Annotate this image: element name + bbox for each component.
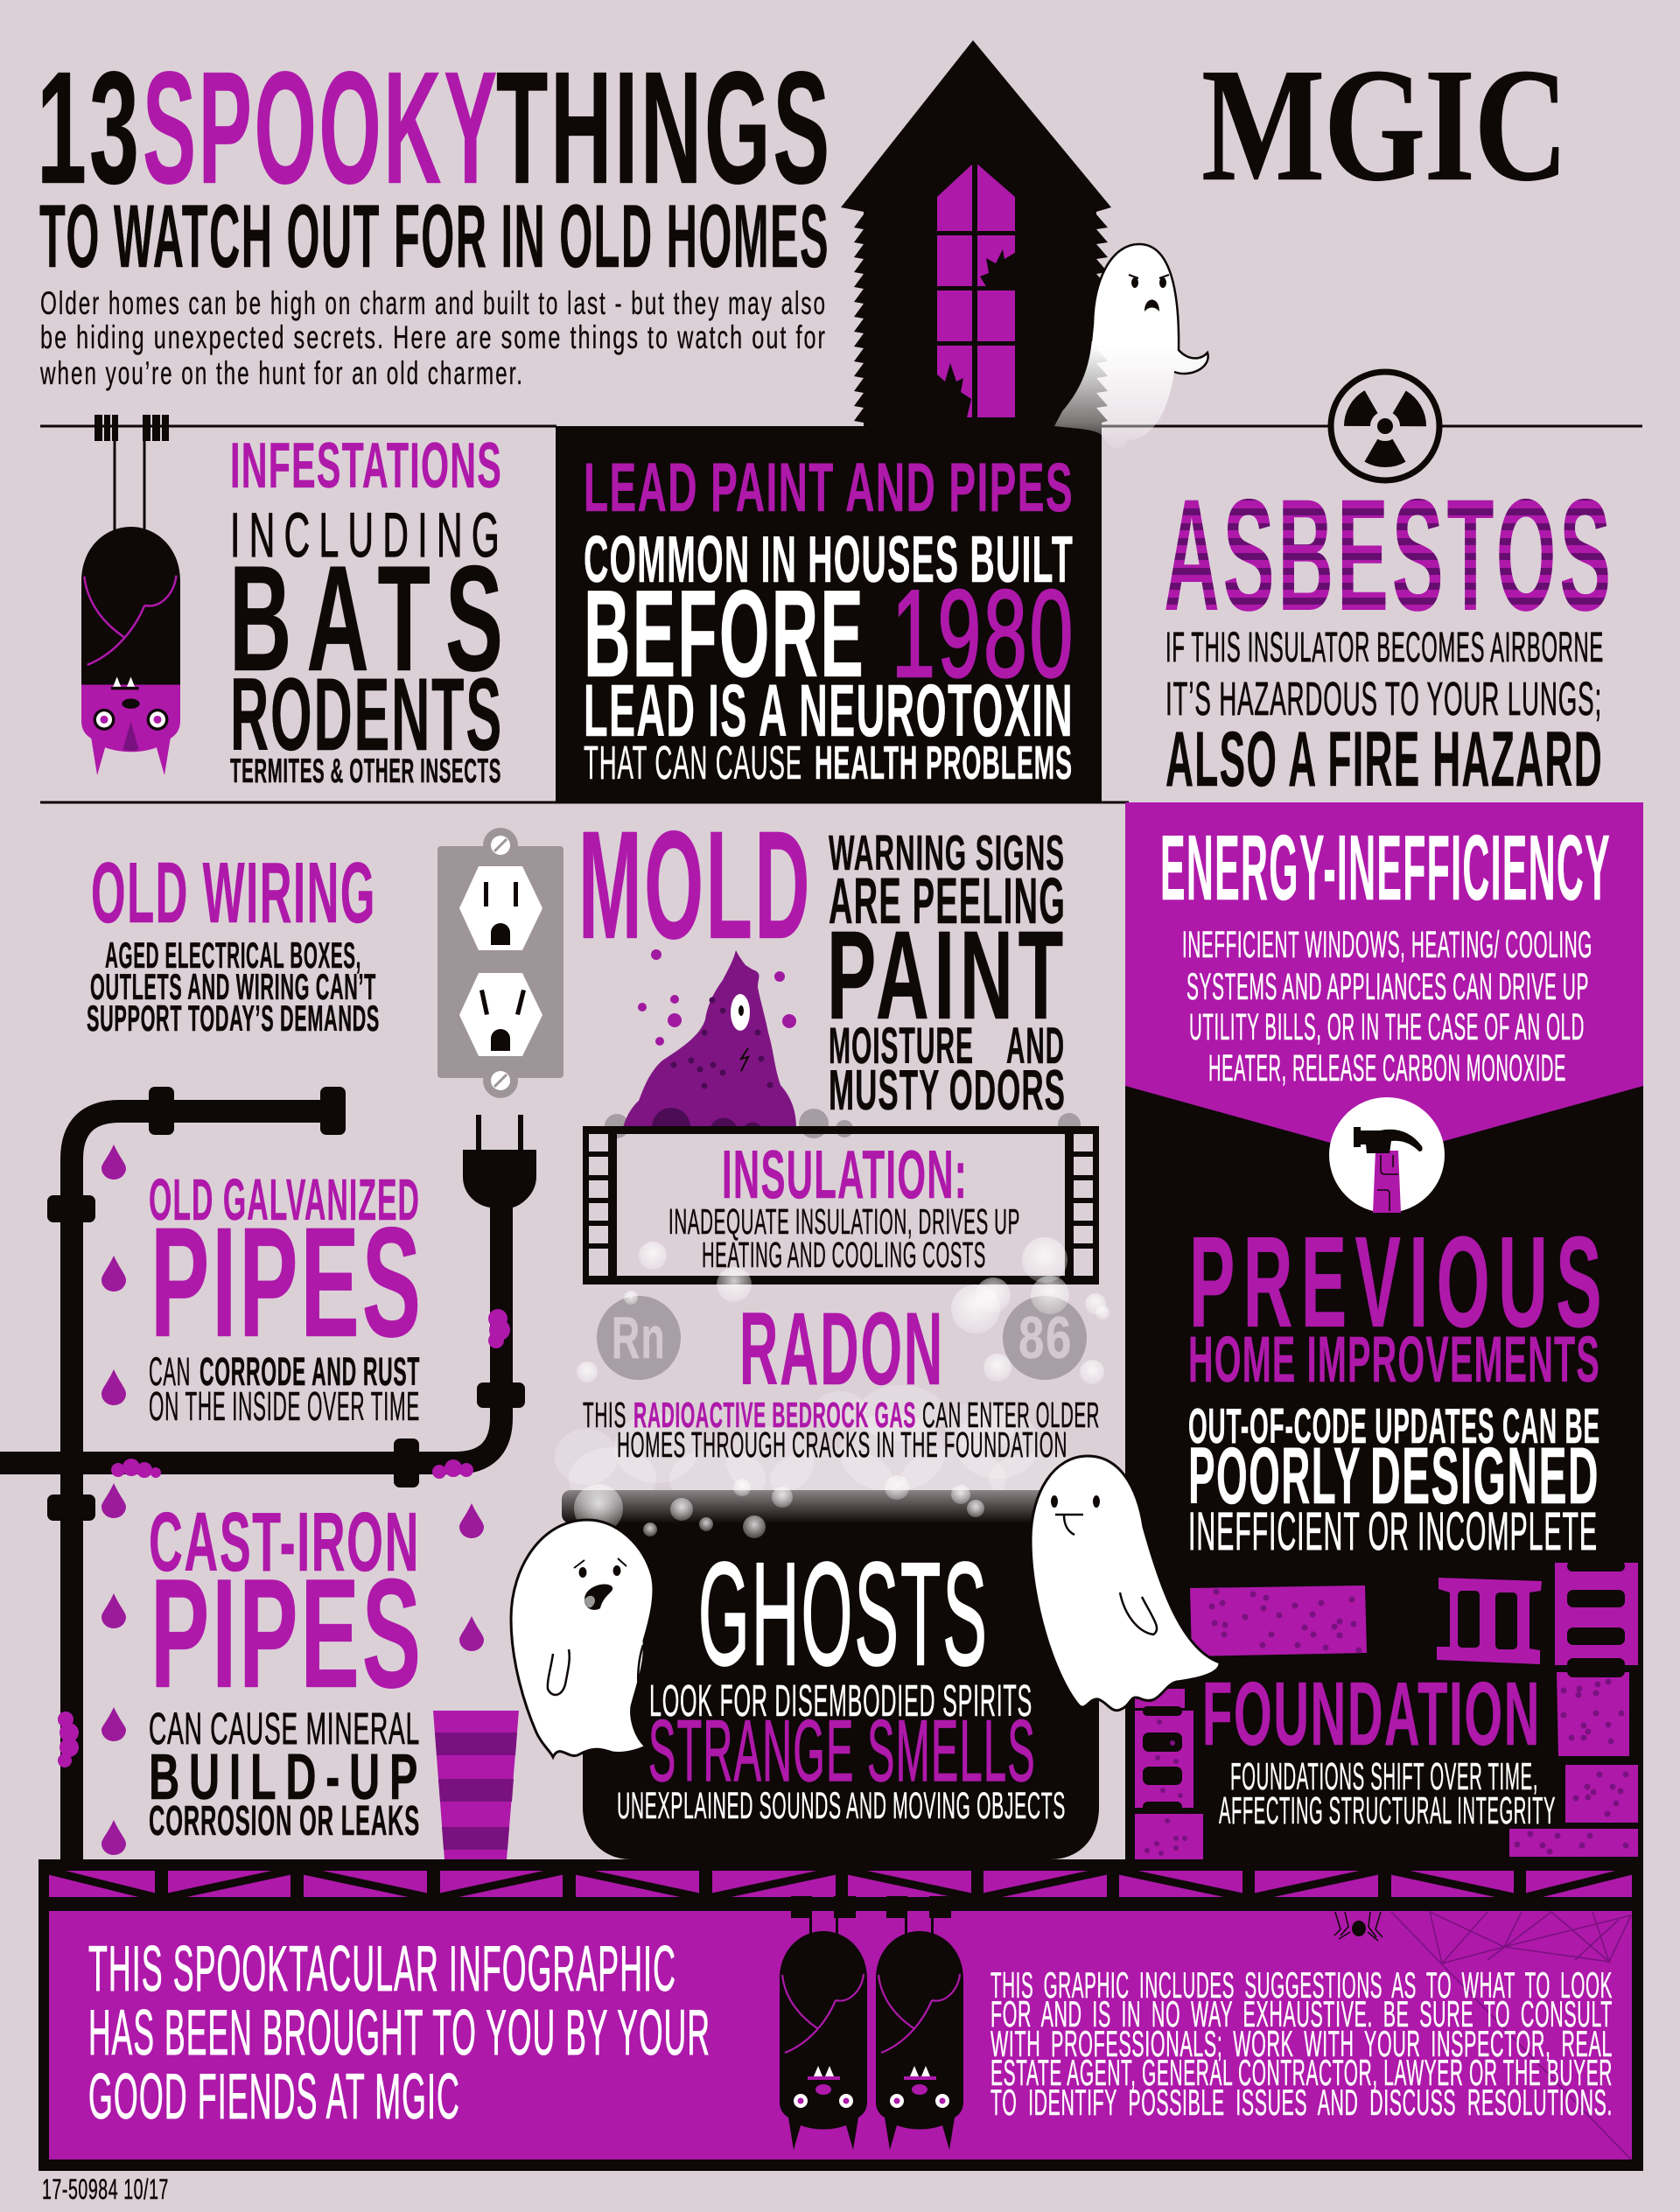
disclaimer text: [990, 1964, 1613, 2123]
bat: footer two: [876, 1896, 963, 2150]
bubbles and mist: [555, 1237, 1110, 1510]
mold text: ARE PEELING: [829, 864, 1066, 937]
intro text: be hiding unexpected secrets. Here are some things to watch out for: [40, 319, 827, 355]
galvanized pipes text: CAN: [149, 1349, 191, 1394]
lead paint text: THAT CAN CAUSE: [584, 737, 802, 789]
infestations text: TERMITES & OTHER INSECTS: [230, 752, 501, 790]
infestations text: INFESTATIONS: [230, 430, 502, 501]
rust: [58, 1309, 510, 1768]
insulation box: [583, 1126, 1099, 1284]
old wiring text: OLD WIRING: [91, 844, 376, 941]
old wiring text: [87, 844, 380, 1039]
text: TO WATCH OUT FOR IN OLD HOMES: [39, 186, 830, 286]
radon elements: [597, 1296, 1087, 1380]
mold text: MUSTY ODORS: [829, 1058, 1066, 1122]
ghosts text: LOOK FOR DISEMBODIED SPIRITS: [649, 1676, 1032, 1726]
mold text: [578, 800, 1068, 1122]
intro text: when you’re on the hunt for an old charmer.: [39, 355, 524, 391]
footer left text: THIS SPOOKTACULAR INFOGRAPHIC: [88, 1934, 676, 2005]
socket top: [459, 866, 542, 950]
title: 13: [37, 38, 142, 217]
radon text: [583, 1292, 1100, 1465]
radon text: RADIOACTIVE BEDROCK GAS: [634, 1395, 916, 1435]
infestations text: INCLUDING: [230, 501, 508, 570]
ghost: window: [1054, 244, 1208, 449]
spider web: [1391, 1912, 1631, 2160]
ghost: sad: [511, 1520, 654, 1757]
intro text: [39, 285, 827, 391]
glass: [433, 1711, 519, 1859]
cast iron pipes text: PIPES: [150, 1546, 424, 1720]
bat feet: [94, 415, 169, 441]
lead paint text: HEALTH PROBLEMS: [815, 737, 1073, 789]
radon text: HOMES THROUGH CRACKS IN THE FOUNDATION: [617, 1424, 1068, 1465]
galvanized pipes text: CORRODE AND RUST: [200, 1349, 420, 1394]
house: [841, 40, 1111, 426]
mold text: AND: [1006, 1018, 1065, 1074]
footer left text: GOOD FIENDS AT MGIC: [88, 2062, 460, 2132]
lead paint text: 1980: [892, 564, 1075, 704]
pipes: [0, 1087, 536, 1864]
mold blob: [605, 949, 1081, 1138]
brick slots and speckles: [1143, 1561, 1625, 1813]
icon: radiation: [1331, 372, 1439, 480]
smiling face: [1051, 1495, 1100, 1535]
window: [937, 162, 1018, 417]
cauldron: [562, 1475, 1122, 1859]
bat: infestations: [81, 415, 180, 775]
cast iron pipes text: CORROSION OR LEAKS: [149, 1798, 420, 1844]
footer left text: [88, 1934, 710, 2132]
sad face: [574, 1558, 626, 1610]
insulation box: HEATING AND COOLING COSTS: [702, 1235, 986, 1275]
lead paint text: BEFORE: [584, 564, 865, 704]
footer panel: HAS BEEN BROUGHT TO YOU BY YOUR: [88, 1998, 710, 2068]
lead paint text: COMMON IN HOUSES BUILT: [584, 522, 1074, 596]
mold text: MOISTURE: [829, 1018, 974, 1074]
radon text: THIS: [583, 1395, 626, 1435]
infestations text: BATS: [229, 535, 518, 703]
bat: footer one: [780, 1896, 867, 2150]
ghost face: [1129, 275, 1169, 312]
infestations text: [229, 430, 518, 790]
lead paint text: [584, 448, 1075, 789]
lead paint text: LEAD PAINT AND PIPES: [584, 448, 1074, 526]
mold text: MOLD: [578, 800, 812, 971]
insulation box: INSULATION:: [722, 1136, 968, 1213]
icon: plug: [463, 1115, 536, 1214]
radon text: RADON: [739, 1292, 944, 1407]
icon: spider: [1334, 1912, 1382, 1941]
socket bottom: [459, 973, 542, 1056]
galvanized pipes text: PIPES: [150, 1194, 424, 1369]
old wiring text: OUTLETS AND WIRING CAN’T: [90, 966, 376, 1007]
truss: [49, 1871, 1632, 1897]
mold text: WARNING SIGNS: [829, 825, 1065, 881]
energy text: [1160, 816, 1611, 1089]
MGIC logo: MGIC: [1201, 35, 1567, 215]
ghosts text: STRANGE SMELLS: [648, 1702, 1036, 1799]
footer panel: [38, 1859, 1643, 2171]
lead paint text: LEAD IS A NEUROTOXIN: [584, 669, 1074, 752]
radon elements: 86: [1018, 1305, 1073, 1371]
improvements text: [1188, 1210, 1610, 1561]
title: THINGS: [496, 38, 832, 217]
cast iron pipes text: CAN CAUSE MINERAL: [149, 1704, 420, 1754]
cauldron: UNEXPLAINED SOUNDS AND MOVING OBJECTS: [617, 1785, 1066, 1827]
panel: energy and improvements: [1125, 802, 1643, 1859]
water drops: [102, 1144, 484, 1855]
foundation bricks: [1135, 1563, 1638, 1859]
old wiring text: AGED ELECTRICAL BOXES,: [105, 934, 361, 976]
infestations text: RODENTS: [230, 657, 503, 773]
divider lines: [40, 425, 1642, 427]
ghost: smiling: [1031, 1456, 1220, 1711]
outlet: [438, 828, 564, 1098]
cast iron pipes text: CAST-IRON: [149, 1495, 420, 1589]
cast iron pipes text: [149, 1495, 427, 1844]
lead panel: [556, 426, 1102, 802]
insulation box: INADEQUATE INSULATION, DRIVES UP: [668, 1201, 1020, 1242]
old wiring text: SUPPORT TODAY’S DEMANDS: [87, 998, 380, 1039]
icon: hammer: [1329, 1097, 1445, 1213]
cast iron pipes text: BUILD-UP: [149, 1740, 427, 1813]
galvanized pipes text: [149, 1167, 424, 1429]
ghosts text: GHOSTS: [698, 1533, 989, 1696]
text: ON THE INSIDE OVER TIME: [149, 1383, 420, 1429]
improvements text: POORLY: [1188, 1432, 1362, 1521]
mold text: PAINT: [827, 905, 1068, 1046]
job code: 17-50984 10/17: [42, 2174, 169, 2205]
asbestos: [1164, 466, 1614, 802]
text: CAN ENTER OLDER: [922, 1395, 1100, 1435]
ghosts text: [617, 1533, 1066, 1827]
galvanized pipes text: OLD GALVANIZED: [149, 1167, 420, 1233]
radon elements: Rn: [612, 1305, 666, 1371]
foundation text: [1202, 1663, 1556, 1832]
intro text: Older homes can be high on charm and built to last - but they may also: [40, 285, 827, 321]
title: SPOOKY: [143, 38, 500, 217]
